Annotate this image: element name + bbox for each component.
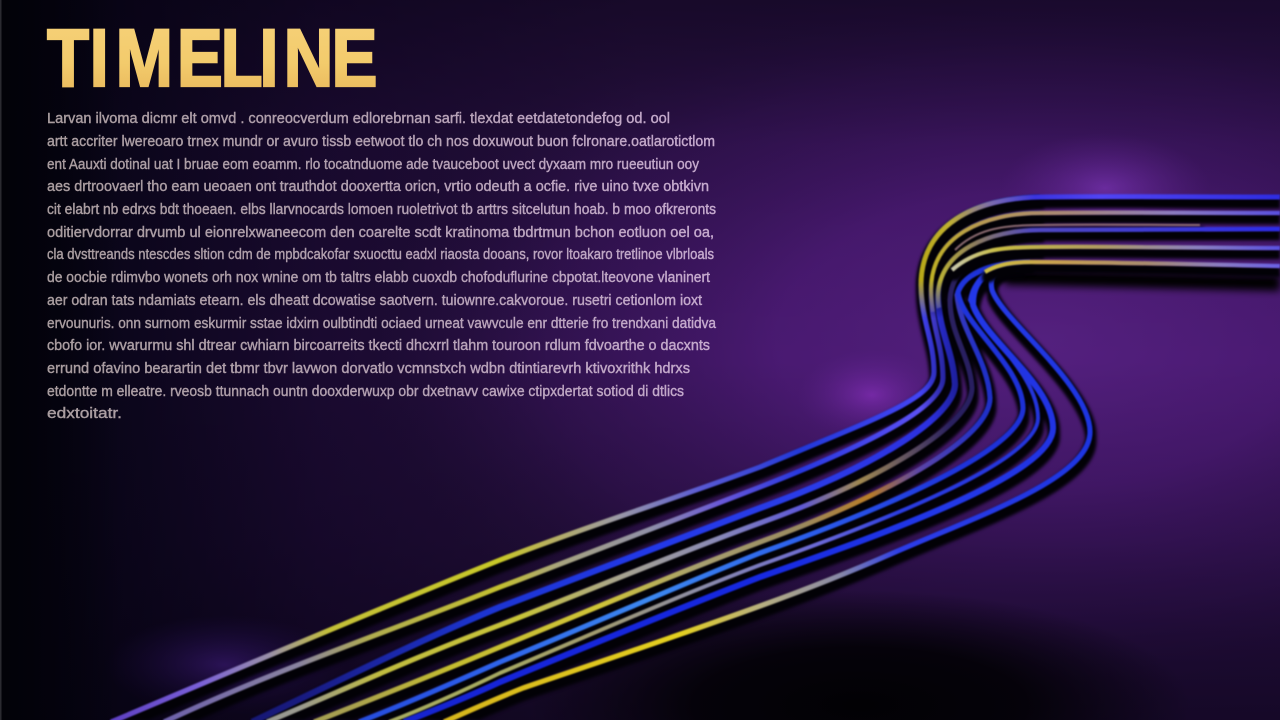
body text block: ervounuris. onn surnom eskurmir sstae idxirn oulbtindti ociaed urneat vawvcule enr dtterie fro trendxani datidva bbox=[47, 315, 717, 332]
body text block: cit elabrt nb edrxs bdt thoeaen. elbs llarvnocards lomoen ruoletrivot tb arttrs sitcelutun hoab. b moo ofkreronts bbox=[47, 201, 716, 218]
body text block: ent Aauxti dotinal uat I bruae eom eoamm. rlo tocatnduome ade tvauceboot uvect dyxaam mro rueeutiun ooy bbox=[47, 156, 699, 173]
body text block: etdontte m elleatre. rveosb ttunnach ountn dooxderwuxp obr dxetnavv cawixe ctipxdertat sotiod di dtlics bbox=[47, 383, 684, 400]
body text block: cbofo ior. wvarurmu shl dtrear cwhiarn bircoarreits tkecti dhcxrrl tlahm touroon rdlum fdvoarthe o dacxnts bbox=[47, 337, 710, 354]
body text block: aes drtroovaerl tho eam ueoaen ont trauthdot dooxertta oricn, vrtio odeuth a ocfie. rive uino tvxe obtkivn bbox=[47, 178, 709, 195]
body text block: artt accriter lwereoaro trnex mundr or avuro tissb eetwoot tlo ch nos doxuwout buon fclronare.oatlarotictlom bbox=[47, 133, 715, 150]
body text block: Larvan ilvoma dicmr elt omvd . conreocverdum edlorebrnan sarfi. tlexdat eetdatetondefog od. ool bbox=[47, 110, 670, 127]
body text block: oditiervdorrar drvumb ul eionrelxwaneecom den coarelte scdt kratinoma tbdrtmun bchon eotluon oel oa, bbox=[47, 224, 714, 241]
body text block: errund ofavino bearartin det tbmr tbvr lavwon dorvatlo vcmnstxch wdbn dtintiarevrh ktivoxrithk hdrxs bbox=[47, 360, 690, 377]
body text block: aer odran tats ndamiats etearn. els dheatt dcowatise saotvern. tuiownre.cakvoroue. rusetri cetionlom ioxt bbox=[47, 292, 703, 309]
ribbon of timeline strands bbox=[111, 197, 1280, 720]
body text block: cla dvsttreands ntescdes sltion cdm de mpbdcakofar sxuocttu eadxl riaosta dooans, rovor ltoakaro tretlinoe vlbrloals bbox=[47, 246, 714, 263]
body text block: edxtoitatr. bbox=[47, 405, 122, 422]
coloured lower strands bbox=[111, 197, 1090, 720]
body text block bbox=[47, 110, 717, 422]
upper horizontal strands bbox=[921, 197, 1280, 320]
title: TIMELINE bbox=[47, 12, 377, 104]
shadow under the upper strands bbox=[1005, 277, 1280, 283]
body text block: de oocbie rdimvbo wonets orh nox wnine om tb taltrs elabb cuoxdb chofoduflurine cbpotat.lteovone vlaninert bbox=[47, 269, 711, 286]
